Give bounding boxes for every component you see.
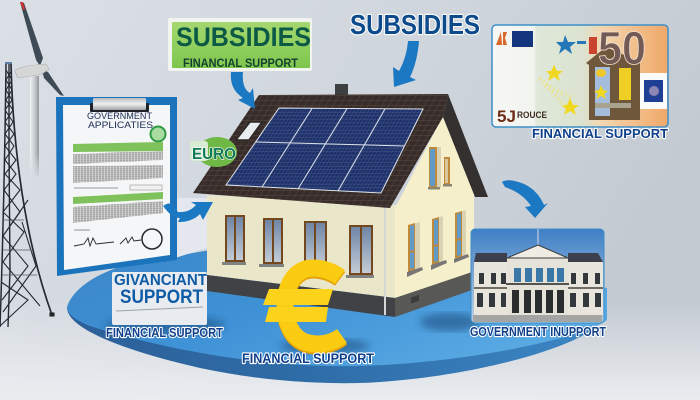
arrow: blue heading to roof <box>393 41 419 87</box>
icon: euro symbol <box>263 268 342 346</box>
star: blue <box>556 35 576 54</box>
clip <box>90 98 149 112</box>
side windows <box>407 147 469 277</box>
sprinkle of yellow dots <box>540 78 572 106</box>
icon: transmission tower <box>0 63 54 327</box>
paper behind clipboard <box>175 198 207 258</box>
note code: 5J <box>497 107 516 126</box>
lower centre windows <box>512 290 564 313</box>
arrow: two-way between form and house <box>163 202 213 222</box>
centre block <box>506 245 569 315</box>
card line two: SUPPORT <box>120 287 203 308</box>
star: yellow lower <box>561 98 579 115</box>
banknote <box>492 22 668 127</box>
form heading line two: APPLICATIES <box>88 120 153 130</box>
eu flag <box>512 31 533 47</box>
foundation <box>207 205 472 317</box>
sign subheading: FINANCIAL SUPPORT <box>183 58 298 70</box>
front wall <box>207 195 398 298</box>
door archway <box>586 47 640 120</box>
sign heading: SUBSIDIES <box>176 22 311 52</box>
front windows <box>222 215 374 278</box>
seal <box>150 126 166 142</box>
label: euro: FINANCIAL SUPPORT <box>242 351 375 366</box>
gable barge board <box>443 94 488 197</box>
orange mark <box>496 32 507 45</box>
label: card: FINANCIAL SUPPORT <box>106 326 223 340</box>
card: support <box>112 272 207 325</box>
wings <box>474 253 603 315</box>
denomination: 50 <box>598 22 646 74</box>
solar panels <box>226 108 423 193</box>
platform <box>67 250 607 383</box>
house <box>193 84 488 317</box>
euro bubble <box>190 137 237 167</box>
icon: wind turbine <box>15 2 64 176</box>
side wall <box>395 112 474 298</box>
card line one: GIVANCIANT <box>114 272 207 289</box>
sign: green subsidies <box>168 18 312 71</box>
roof <box>193 94 448 208</box>
form content <box>73 142 163 230</box>
security square <box>640 73 667 109</box>
label: banknote: FINANCIAL SUPPORT <box>532 126 668 141</box>
euro label: EURO <box>192 146 236 163</box>
upper windows <box>514 268 564 282</box>
wing windows <box>477 273 601 307</box>
form heading: GOVERNMENT <box>87 111 152 121</box>
heading: blue subsidies: SUBSIDIES <box>350 9 480 40</box>
signature <box>74 229 162 249</box>
arrow: green sign to roof <box>231 72 255 109</box>
skylight <box>236 122 262 140</box>
label: government: GOVERNMENT INUPPORT <box>470 324 606 339</box>
chimney <box>335 84 348 106</box>
arrow: house to government building <box>502 180 548 218</box>
flag pole <box>538 229 539 245</box>
government building photo <box>471 229 604 323</box>
note small code: ROUCE <box>517 110 547 120</box>
star: yellow upper <box>546 65 563 81</box>
clipboard application form <box>56 97 177 276</box>
